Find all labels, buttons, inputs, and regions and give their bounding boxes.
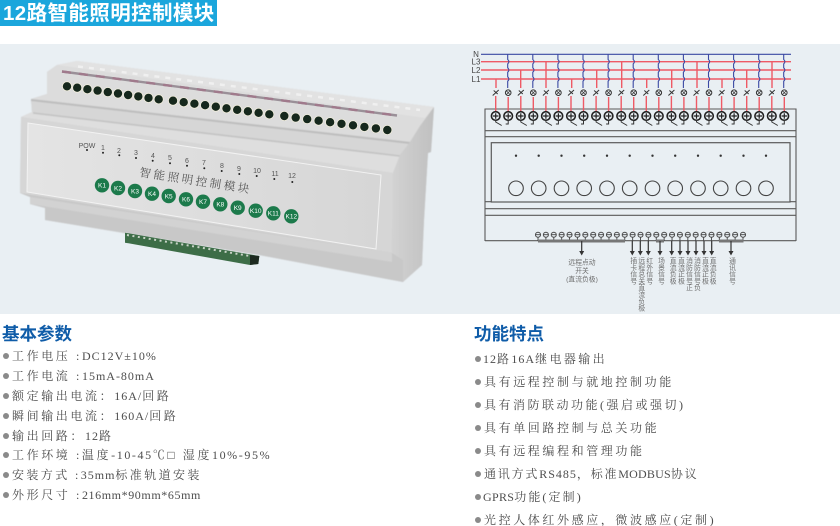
green channel keys K1-K12: K7 bbox=[199, 199, 207, 206]
terminal labels: 直流负极 bbox=[708, 256, 717, 285]
green channel keys K1-K12: K4 bbox=[148, 191, 156, 198]
bus labels N L3 L2 L1: L1 bbox=[472, 75, 481, 84]
terminal brackets and arrows bbox=[538, 241, 744, 256]
product illustration: lighting control module bbox=[20, 61, 434, 282]
green channel keys K1-K12: K12 bbox=[286, 214, 297, 221]
bus labels N L3 L2 L1: L2 bbox=[472, 66, 481, 75]
indicator lights and numbers: 3 bbox=[134, 150, 138, 157]
terminal labels: 场景信号 bbox=[656, 256, 665, 285]
terminal labels: 直流正极 bbox=[700, 256, 709, 285]
terminal holes bbox=[67, 86, 387, 130]
terminal labels: (直流负极) bbox=[566, 274, 598, 284]
title banner: 12路智能照明控制模块 bbox=[3, 2, 215, 25]
indicator lights and numbers: POW bbox=[79, 143, 96, 150]
neutral drop lines bbox=[508, 54, 785, 88]
green channel keys K1-K12: K9 bbox=[234, 205, 242, 212]
terminal labels: 直流负极 bbox=[668, 256, 677, 285]
wiring diagram bbox=[472, 50, 797, 313]
bus labels N L3 L2 L1 bbox=[472, 50, 481, 84]
power bus lines bbox=[481, 54, 791, 88]
green channel keys K1-K12: K10 bbox=[250, 208, 262, 215]
list: features: 具有单回路控制与总关功能 bbox=[484, 421, 659, 435]
indicator lights and numbers: 11 bbox=[271, 171, 279, 178]
terminal labels: 远程点动 bbox=[568, 258, 596, 266]
heading: features: 功能特点 bbox=[474, 324, 544, 344]
green channel keys K1-K12: K6 bbox=[182, 197, 190, 204]
list: basic parameters: 外形尺寸 :216mm*90mm*65mm bbox=[12, 488, 201, 502]
indicator lights and numbers: 4 bbox=[151, 153, 155, 160]
terminal labels: 消防信号正 bbox=[684, 256, 693, 291]
bus labels N L3 L2 L1: N bbox=[473, 50, 479, 59]
green channel keys K1-K12 bbox=[95, 178, 298, 224]
list: basic parameters: 工作电流 :15mA-80mA bbox=[12, 369, 155, 383]
list: features: GPRS功能(定制) bbox=[483, 490, 583, 504]
key circles bbox=[509, 181, 773, 196]
green channel keys K1-K12: K11 bbox=[268, 211, 279, 218]
panel: product image and wiring background bbox=[0, 44, 840, 314]
control terminal row bbox=[534, 231, 747, 241]
terminal labels: 直流正极 bbox=[676, 256, 685, 285]
terminal labels: 通讯信号 bbox=[728, 256, 736, 285]
list: basic parameters: 输出回路：12路 bbox=[12, 429, 114, 443]
list: basic parameters: 瞬间输出电流：160A/回路 bbox=[12, 409, 178, 423]
list: basic parameters: 安装方式 :35mm标准轨道安装 bbox=[12, 468, 202, 482]
list: basic parameters: 额定输出电流：16A/回路 bbox=[12, 389, 171, 403]
module outline bbox=[485, 109, 796, 241]
green bottom terminal strip bbox=[125, 233, 259, 265]
list: features bbox=[475, 352, 716, 526]
indicator lights and numbers: 9 bbox=[237, 166, 241, 173]
green channel keys K1-K12: K3 bbox=[131, 188, 139, 195]
bus labels N L3 L2 L1: L3 bbox=[472, 58, 481, 66]
indicator lights and numbers: 6 bbox=[185, 158, 189, 165]
indicator lights and numbers: 1 bbox=[101, 145, 105, 152]
panel label: 智能照明控制模块 bbox=[139, 165, 253, 196]
terminal labels: 远程总关直流负极 bbox=[637, 257, 645, 313]
green channel keys K1-K12: K5 bbox=[165, 193, 173, 200]
terminal labels: 插卡信号 bbox=[629, 256, 637, 285]
indicator lights and numbers: 8 bbox=[220, 163, 224, 170]
indicator dots bbox=[516, 154, 766, 157]
indicator lights and numbers: 5 bbox=[168, 155, 172, 162]
relay terminals and switches bbox=[491, 90, 789, 126]
list: basic parameters: 工作环境 :温度-10-45℃□ 湿度10%-95% bbox=[12, 448, 271, 462]
indicator lights and numbers: 12 bbox=[288, 173, 296, 180]
green channel keys K1-K12: K1 bbox=[98, 183, 106, 190]
list: features: 通讯方式RS485，标准MODBUS协议 bbox=[484, 467, 698, 481]
list: features: 12路16A继电器输出 bbox=[483, 352, 607, 366]
device body bbox=[20, 61, 434, 282]
green channel keys K1-K12: K8 bbox=[216, 202, 225, 209]
list: features: 具有远程编程和管理功能 bbox=[484, 444, 645, 458]
list: features: 具有远程控制与就地控制功能 bbox=[484, 375, 674, 389]
list: features: 具有消防联动功能(强启或强切) bbox=[484, 398, 686, 412]
terminal labels bbox=[566, 256, 736, 313]
indicator lights and numbers: 7 bbox=[202, 160, 206, 167]
list: basic parameters: 工作电压 :DC12V±10% bbox=[12, 349, 157, 363]
indicator lights and numbers: 10 bbox=[253, 168, 261, 175]
heading: basic parameters: 基本参数 bbox=[2, 324, 72, 344]
terminal labels: 红外信号 bbox=[645, 256, 653, 285]
terminal labels: 开关 bbox=[575, 266, 589, 275]
front panel bbox=[27, 123, 381, 249]
top colour label strip bbox=[62, 72, 397, 116]
indicator lights and numbers bbox=[79, 143, 296, 182]
top screw row bbox=[78, 66, 420, 110]
indicator lights and numbers: 2 bbox=[117, 148, 121, 155]
terminal labels: 消防信号负 bbox=[692, 256, 701, 292]
list: basic parameters bbox=[3, 349, 271, 502]
green channel keys K1-K12: K2 bbox=[114, 185, 122, 192]
